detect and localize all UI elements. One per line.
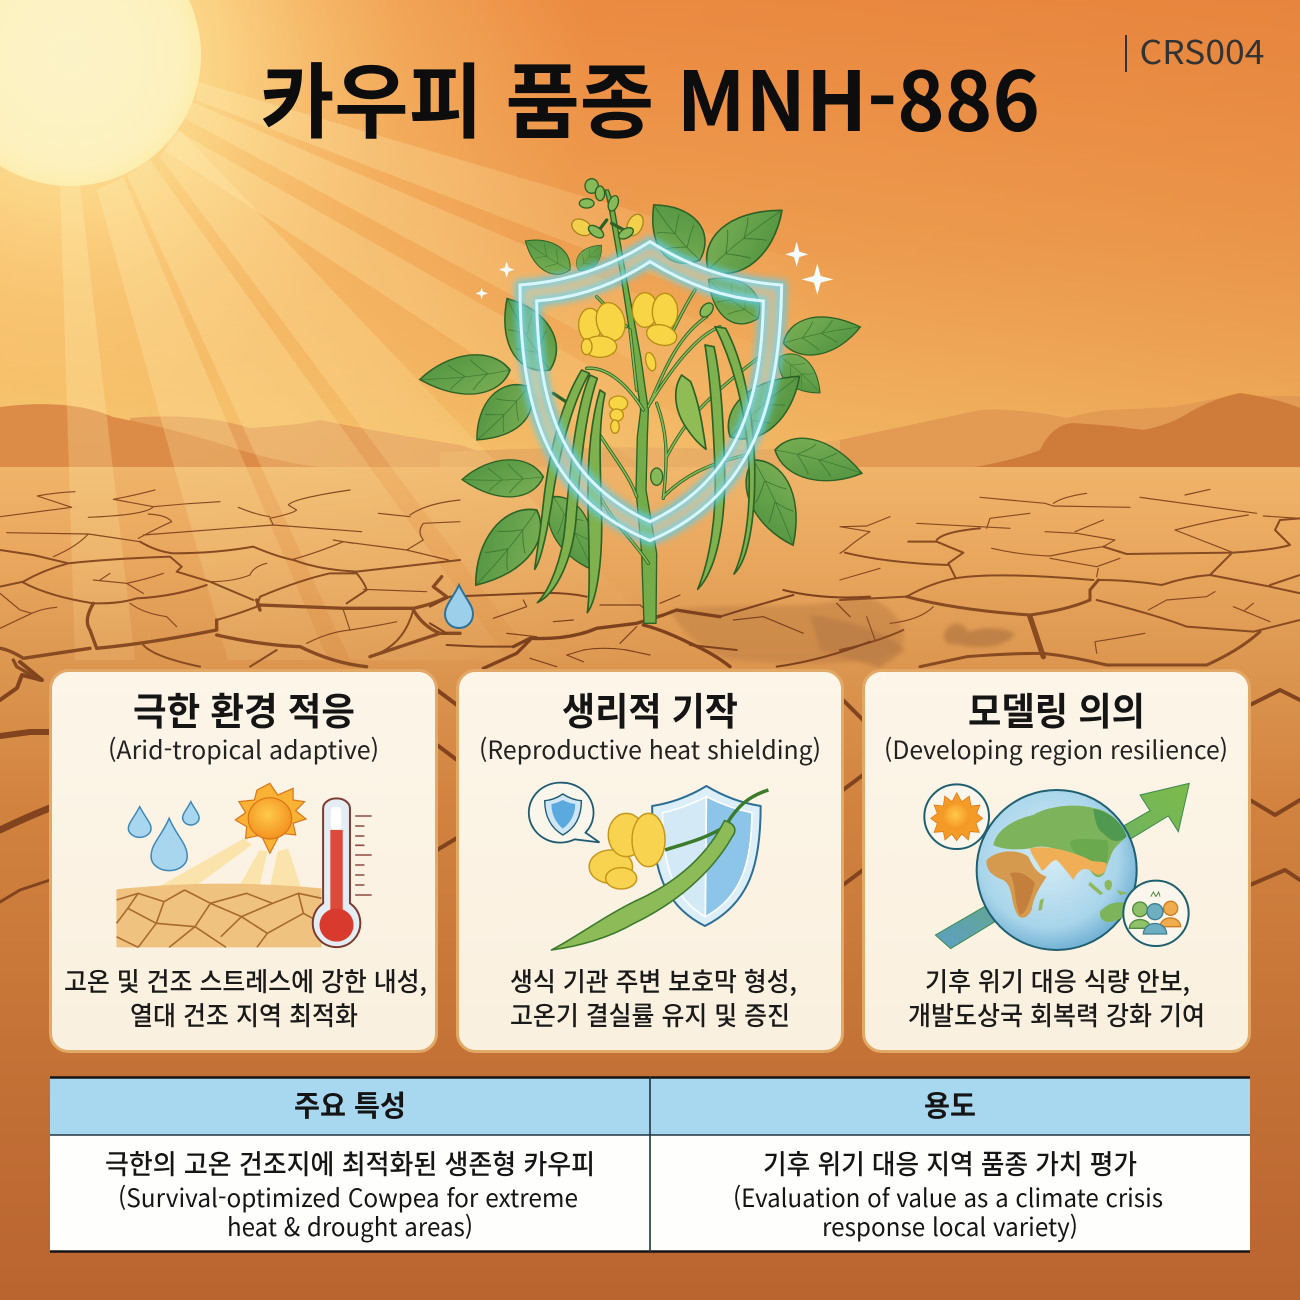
cell: use: (Evaluation of value as a climate crisis bbox=[733, 1179, 1163, 1215]
card subheading: (Developing region resilience) bbox=[884, 731, 1228, 767]
title: 카우피 품종 MNH-886 bbox=[260, 36, 1040, 155]
cell: key traits: 극한의 고온 건조지에 최적화된 생존형 카우피 bbox=[105, 1143, 595, 1182]
card description: 생식 기관 주변 보호막 형성, bbox=[510, 962, 797, 999]
ground cracks centre bbox=[430, 590, 870, 668]
flower buds at top bbox=[569, 179, 716, 485]
cell: key traits: heat & drought areas) bbox=[227, 1208, 473, 1244]
distant dunes bbox=[0, 393, 1300, 470]
people circle bbox=[1123, 881, 1189, 946]
icon: thermometer bbox=[313, 798, 372, 947]
card description bbox=[64, 962, 427, 1033]
small sun circle bbox=[924, 784, 989, 849]
card description: 고온기 결실률 유지 및 증진 bbox=[510, 996, 790, 1033]
card heading: 극한 환경 적응 bbox=[133, 681, 355, 736]
card heading: 모델링 의의 bbox=[968, 681, 1145, 736]
icon: water drops bbox=[128, 802, 199, 871]
hero: cowpea plant with glowing shield bbox=[418, 179, 867, 623]
card description bbox=[510, 962, 797, 1033]
column header: key traits: 주요 특성 bbox=[294, 1083, 406, 1125]
summary table bbox=[50, 1077, 1250, 1252]
growth arrow bbox=[935, 783, 1189, 949]
plant stems bbox=[553, 190, 760, 623]
sun bbox=[0, 0, 201, 186]
large shield bbox=[652, 786, 761, 926]
icon: globe, arrow, sun, people bbox=[924, 783, 1189, 950]
water drop bbox=[445, 585, 473, 628]
panel: extreme environment adaptation bbox=[50, 670, 436, 1052]
code label: CRS004: CRS004 bbox=[1140, 26, 1264, 74]
card description: 열대 건조 지역 최적화 bbox=[130, 996, 358, 1033]
yellow flowers bbox=[579, 293, 679, 433]
margin cracks bbox=[0, 662, 1300, 902]
bean pods bbox=[535, 327, 755, 613]
card subheading: (Reproductive heat shielding) bbox=[479, 731, 821, 767]
cell: use bbox=[733, 1143, 1163, 1244]
panel: physiological mechanism bbox=[458, 670, 842, 1052]
speech bubble with small shield bbox=[529, 783, 599, 843]
card description: 개발도상국 회복력 강화 기여 bbox=[908, 996, 1205, 1033]
cell: key traits: (Survival-optimized Cowpea for extreme bbox=[118, 1179, 578, 1215]
ground shadows near plant bbox=[670, 597, 1015, 668]
globe bbox=[977, 790, 1137, 950]
cell: use: 기후 위기 대응 지역 품종 가치 평가 bbox=[763, 1143, 1137, 1182]
plant leaves bbox=[418, 190, 867, 600]
icon: drops, sun, cracked soil, thermometer bbox=[116, 783, 372, 947]
ground cracks left bbox=[0, 490, 460, 680]
cracked ground bbox=[0, 467, 1300, 1300]
icon: sun bbox=[235, 783, 306, 853]
card description: 고온 및 건조 스트레스에 강한 내성, bbox=[64, 962, 427, 999]
card heading: 생리적 기작 bbox=[562, 681, 738, 736]
pod bbox=[551, 790, 768, 950]
panel: modelling significance bbox=[864, 670, 1250, 1052]
cell: use: response local variety) bbox=[822, 1208, 1078, 1244]
card description: 기후 위기 대응 식량 안보, bbox=[925, 962, 1190, 999]
sparkles bbox=[475, 242, 833, 299]
glowing shield bbox=[520, 242, 782, 541]
icon: flower, pod and shield bbox=[529, 783, 768, 950]
cell: key traits bbox=[105, 1143, 595, 1244]
column header: use: 용도 bbox=[924, 1083, 976, 1125]
card subheading: (Arid-tropical adaptive) bbox=[108, 731, 379, 767]
card description bbox=[908, 962, 1205, 1033]
sun rays bbox=[60, 82, 900, 660]
yellow flower bbox=[589, 813, 665, 889]
ground cracks right bbox=[840, 489, 1300, 667]
